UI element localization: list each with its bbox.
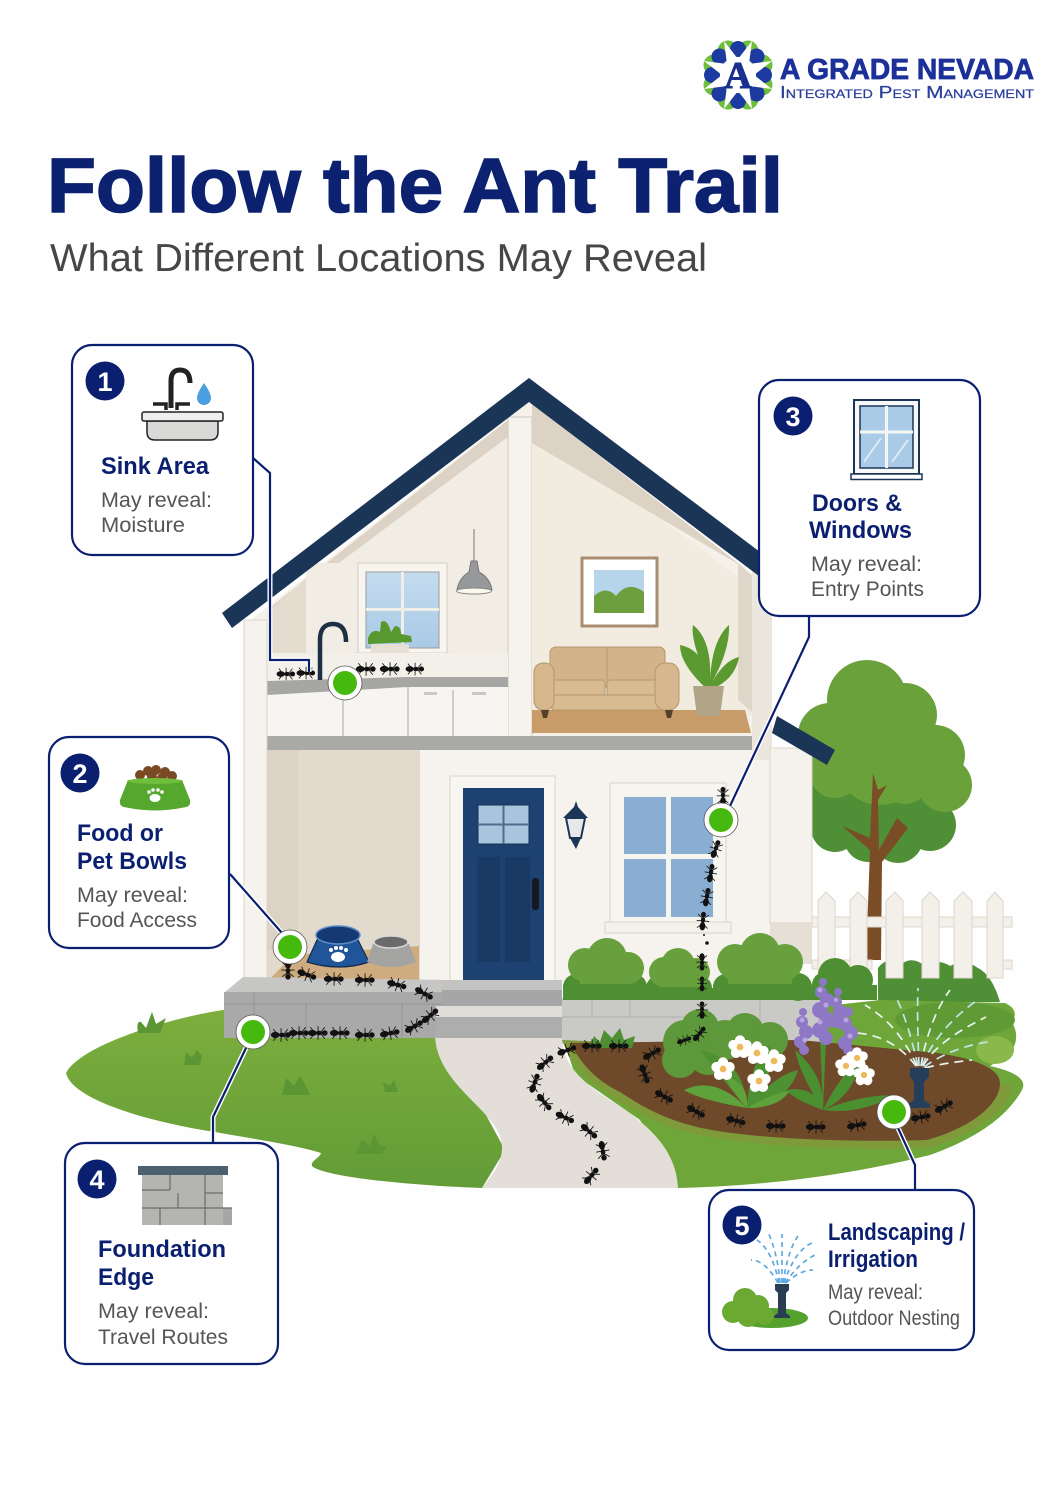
center post (508, 417, 532, 737)
logo (704, 40, 1035, 110)
text: food access: May reveal: (77, 883, 188, 907)
porch recess (267, 750, 420, 982)
small side roof (772, 716, 835, 765)
right lawn (562, 1000, 1023, 1188)
text: travel routes: Travel Routes (98, 1325, 228, 1349)
small grass plant (589, 1028, 635, 1048)
heading: foundation edge (98, 1236, 226, 1291)
tree trunk (842, 773, 908, 960)
text: food access (77, 883, 197, 932)
front bushes (563, 933, 877, 1001)
right side column (752, 565, 812, 964)
bed shrub (662, 1009, 788, 1078)
icon: pet bowl (120, 765, 190, 810)
bush four (812, 958, 877, 1000)
left room back wall (306, 437, 508, 653)
leader line 4 (213, 1048, 246, 1143)
title: Follow the Ant Trail (47, 143, 783, 229)
number badge 3 (774, 396, 812, 436)
kitchen faucet (320, 624, 346, 680)
panel: foundation edge (65, 1143, 278, 1364)
floor plant (680, 625, 739, 716)
floor slab (267, 736, 752, 750)
heading: foundation edge: Foundation (98, 1236, 226, 1263)
number badge 5 (722, 1206, 762, 1244)
kitchen counter (267, 677, 508, 695)
leader line 1 (253, 458, 309, 672)
front steps (436, 980, 562, 1038)
text: outdoor nesting: Outdoor Nesting (828, 1306, 960, 1330)
wall picture (582, 558, 657, 626)
heading: landscaping and irrigation (828, 1219, 965, 1273)
kitchen ants (277, 662, 424, 680)
upper floor walls (244, 402, 772, 740)
marker 4 (236, 1015, 270, 1049)
panel: sink area (72, 345, 253, 555)
logo name: A GRADE NEVADA (780, 54, 1034, 86)
marker 1 (328, 666, 362, 700)
bush two (646, 948, 713, 1000)
hedge behind fence (878, 960, 1000, 1002)
leader line 2 (230, 874, 282, 933)
heading: landscaping and irrigation: Irrigation (828, 1246, 918, 1273)
marker 3 (704, 803, 738, 837)
heading: landscaping and irrigation: Landscaping / (828, 1219, 965, 1246)
lower wall (420, 750, 770, 982)
text: entry points: Entry Points (811, 577, 924, 601)
heading: sink area: Sink Area (101, 453, 210, 480)
text: moisture (101, 488, 212, 537)
ant trails (271, 662, 956, 1188)
purple lupins (786, 978, 895, 1111)
heading: food or pet bowls: Food or (77, 820, 163, 847)
sofa (534, 647, 679, 718)
tree canopy upper (798, 660, 972, 812)
pendant lamp (456, 529, 492, 594)
heading: doors and windows: Doors & (812, 490, 902, 517)
left side wall (273, 578, 306, 653)
text: entry points: May reveal: (811, 552, 922, 576)
logo emblem (704, 40, 772, 110)
heading: foundation edge: Edge (98, 1264, 154, 1291)
kitchen window (355, 563, 449, 661)
wall ants (675, 787, 729, 1048)
house (222, 378, 835, 982)
water spray (857, 988, 988, 1068)
garden wall (562, 998, 822, 1044)
text: travel routes: May reveal: (98, 1299, 209, 1323)
marker 2 (273, 930, 307, 964)
wall lantern (563, 801, 588, 849)
sprinkler head (908, 1068, 930, 1108)
garden bed (562, 1040, 1012, 1149)
text: food access: Food Access (77, 908, 197, 932)
heading: food or pet bowls: Pet Bowls (77, 848, 187, 875)
porch ants (281, 960, 442, 1037)
left room sloped ceiling (267, 420, 508, 653)
icon: window (851, 400, 922, 480)
picket fence (812, 892, 1012, 978)
number badge 3: 3 (785, 402, 801, 432)
porch foundation (224, 977, 447, 1038)
icon: sink (142, 370, 223, 440)
heading: doors and windows: Windows (809, 517, 912, 544)
number badge 1 (86, 362, 124, 400)
number badge 1: 1 (97, 367, 113, 397)
subtitle: What Different Locations May Reveal (50, 237, 707, 280)
number badge 4: 4 (89, 1165, 105, 1195)
marker 5 (877, 1095, 911, 1129)
leader line 5 (898, 1128, 915, 1190)
logo tagline: Integrated Pest Management (780, 82, 1035, 102)
text: moisture: May reveal: (101, 488, 212, 512)
blue pet bowl (307, 926, 369, 967)
text: travel routes (98, 1299, 228, 1349)
walkway (435, 1037, 678, 1188)
walkway ants (525, 1041, 611, 1188)
kitchen backsplash (267, 653, 508, 679)
number badge 2: 2 (72, 759, 88, 789)
heading: doors and windows (809, 490, 912, 544)
leader line 3 (730, 616, 809, 806)
icon: sprinkler (722, 1232, 815, 1328)
right room back wall (532, 422, 752, 715)
text: moisture: Moisture (101, 513, 185, 537)
number badge 5: 5 (734, 1211, 750, 1241)
front door (450, 776, 555, 982)
panel: landscaping and irrigation (709, 1190, 974, 1350)
tree canopy lower (810, 780, 956, 863)
number badge 4 (78, 1160, 116, 1198)
number badge 2 (60, 754, 100, 792)
white flower plants (684, 1035, 798, 1108)
left lawn (66, 1010, 505, 1188)
heading: food or pet bowls (77, 820, 187, 875)
text: outdoor nesting: May reveal: (828, 1280, 923, 1304)
living room floor (532, 710, 751, 733)
icon: foundation (138, 1166, 232, 1225)
foundation ants (271, 1025, 401, 1042)
text: entry points (811, 552, 924, 601)
text: outdoor nesting (828, 1280, 960, 1330)
panel: food or pet bowls (49, 737, 229, 948)
grass tufts (137, 1012, 398, 1154)
window plant (368, 621, 412, 653)
bush one (563, 938, 647, 1000)
roof (222, 378, 772, 628)
tree (798, 660, 972, 960)
grey bowl (367, 936, 416, 967)
porch floor (268, 946, 419, 981)
sprinkler (857, 988, 988, 1108)
porch pillar (244, 620, 267, 982)
garden ants (582, 1039, 956, 1134)
logo emblem: A (724, 55, 752, 97)
panel: doors and windows (759, 380, 980, 616)
bush three (713, 933, 813, 1001)
front window (605, 783, 731, 933)
kitchen cabinets (267, 680, 508, 736)
